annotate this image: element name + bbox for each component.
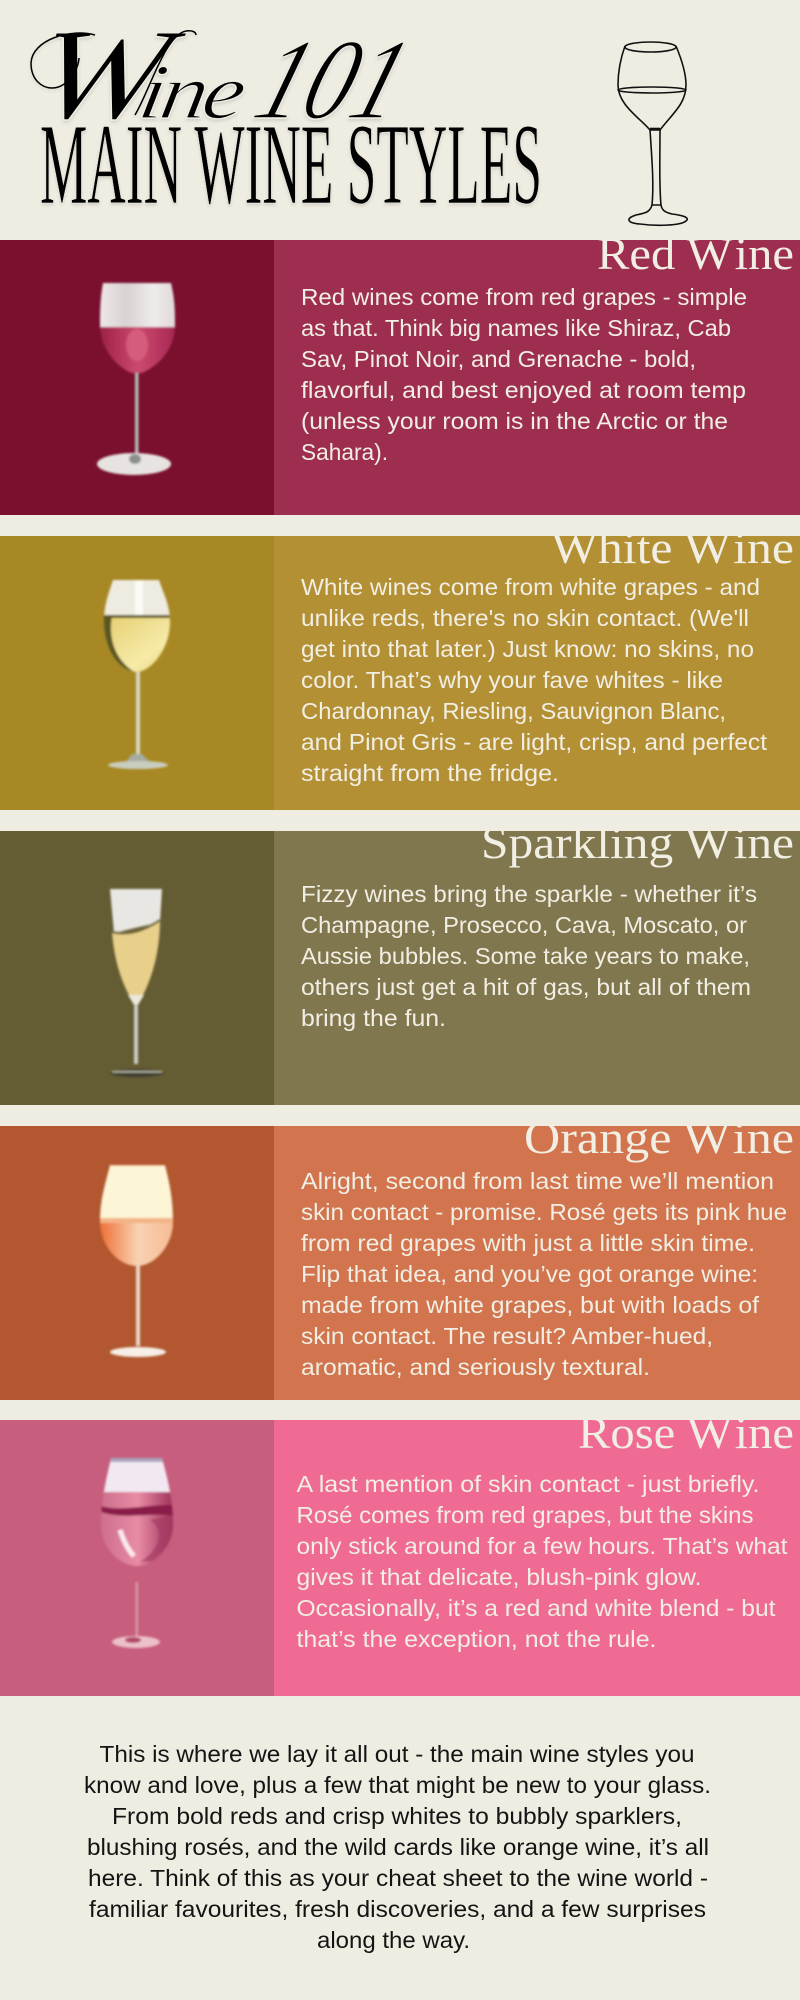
body text: orange wine: skin contact - promise. Rosé gets its pink hue <box>301 1199 787 1225</box>
footer text block <box>84 1741 711 1953</box>
body text: rose wine: Rosé comes from red grapes, but the skins <box>296 1502 754 1528</box>
body text: sparkling wine: Champagne, Prosecco, Cava, Moscato, or <box>301 912 747 938</box>
body text: red wine: (unless your room is in the Arctic or the <box>301 408 728 434</box>
footer text block: familiar favourites, fresh discoveries, and a few surprises <box>89 1896 706 1922</box>
body text: orange wine: aromatic, and seriously textural. <box>301 1354 650 1380</box>
body text: red wine: as that. Think big names like Shiraz, Cab <box>301 315 731 341</box>
body text: red wine: Sahara). <box>301 439 388 465</box>
red text background <box>274 240 800 515</box>
heading: Sparkling Wine: Sparkling W ine <box>481 817 794 868</box>
body text: orange wine: from red grapes with just a little skin time. <box>301 1230 755 1256</box>
white text background <box>274 536 800 810</box>
body text: sparkling wine: others just get a hit of gas, but all of them <box>301 974 751 1000</box>
swash on the W <box>31 31 196 115</box>
icon: orange wine glass <box>98 1160 178 1357</box>
footer text block: blushing rosés, and the wild cards like orange wine, it’s all <box>87 1834 709 1860</box>
icon: red wine glass <box>97 280 178 475</box>
heading: Orange Wine: Orange W ine <box>524 1112 794 1163</box>
body text: white wine: color. That’s why your fave whites - like <box>301 667 723 693</box>
body text: sparkling wine <box>301 881 757 1031</box>
body text: orange wine: Alright, second from last time we’ll mention <box>301 1168 774 1194</box>
sparkling text background <box>274 831 800 1105</box>
script number 101: 101 <box>241 16 425 143</box>
icon: white wine glass <box>100 578 175 769</box>
rose colour block <box>0 1420 274 1696</box>
title: Wine 101 <box>25 3 425 147</box>
body text: white wine <box>301 574 768 786</box>
script word Wine: Wine <box>25 3 260 147</box>
body text: rose wine: only stick around for a few hours. That’s what <box>296 1533 788 1559</box>
panel: rose wine <box>0 1407 800 1696</box>
body text: red wine: Red wines come from red grapes - simple <box>301 284 747 310</box>
red colour block <box>0 240 274 515</box>
footer text block: along the way. <box>317 1927 470 1953</box>
icon: rose wine glass <box>98 1456 178 1648</box>
body text: white wine: and Pinot Gris - are light, crisp, and perfect <box>301 729 768 755</box>
body text: rose wine: gives it that delicate, blush-pink glow. <box>296 1564 702 1590</box>
body text: sparkling wine: Fizzy wines bring the sparkle - whether it’s <box>301 881 757 907</box>
panel: red wine <box>0 228 800 515</box>
body text: orange wine: skin contact. The result? Amber-hued, <box>301 1323 713 1349</box>
footer text block: This is where we lay it all out - the main wine styles you <box>100 1741 694 1767</box>
body text: rose wine: that’s the exception, not the rule. <box>296 1626 656 1652</box>
sparkling colour block <box>0 831 274 1105</box>
body text: red wine <box>301 284 747 465</box>
body text: sparkling wine: bring the fun. <box>301 1005 446 1031</box>
heading: Red Wine: Red Wine <box>597 228 794 279</box>
header <box>25 3 687 228</box>
icon: line-art wine glass <box>618 42 687 225</box>
body text: white wine: straight from the fridge. <box>301 760 559 786</box>
panel: sparkling wine <box>0 817 800 1105</box>
footer text block: know and love, plus a few that might be new to your glass. <box>84 1772 711 1798</box>
footer text block: here. Think of this as your cheat sheet to the wine world - <box>88 1865 708 1891</box>
panel: orange wine <box>0 1112 800 1400</box>
body text: rose wine: A last mention of skin contact - just briefly. <box>296 1471 760 1497</box>
body text: rose wine: Occasionally, it’s a red and white blend - but <box>296 1595 776 1621</box>
body text: white wine: get into that later.) Just know: no skins, no <box>301 636 754 662</box>
body text: red wine: Sav, Pinot Noir, and Grenache - bold, <box>301 346 696 372</box>
body text: orange wine <box>301 1168 787 1380</box>
panel: white wine <box>0 522 800 810</box>
body text: white wine: unlike reds, there's no skin contact. (We'll <box>301 605 749 631</box>
body text: orange wine: Flip that idea, and you’ve got orange wine: <box>301 1261 758 1287</box>
heading: Rose Wine: Rose W ine <box>578 1407 794 1458</box>
body text: sparkling wine: Aussie bubbles. Some take years to make, <box>301 943 750 969</box>
body text: rose wine <box>296 1471 788 1652</box>
orange colour block <box>0 1126 274 1400</box>
body text: orange wine: made from white grapes, but with loads of <box>301 1292 760 1318</box>
body text: white wine: White wines come from white grapes - and <box>301 574 760 600</box>
rose text background <box>274 1420 800 1696</box>
body text: white wine: Chardonnay, Riesling, Sauvignon Blanc, <box>301 698 726 724</box>
white colour block <box>0 536 274 810</box>
heading: White Wine: White W ine <box>551 522 794 573</box>
body text: red wine: flavorful, and best enjoyed at room temp <box>301 377 746 403</box>
footer text block: From bold reds and crisp whites to bubbly sparklers, <box>112 1803 682 1829</box>
orange text background <box>274 1126 800 1400</box>
icon: sparkling wine flute <box>110 889 164 1077</box>
